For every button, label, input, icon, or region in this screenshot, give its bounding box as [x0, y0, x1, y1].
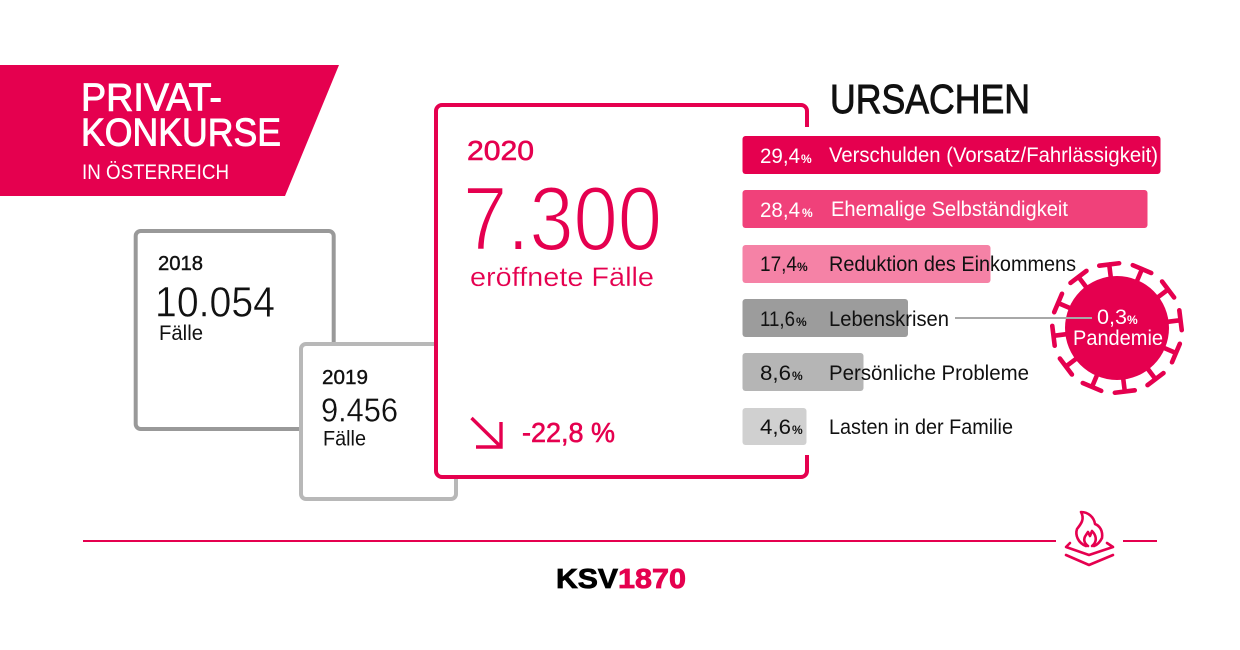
virus: Pandemie: Pandemie [1073, 327, 1163, 350]
title banner [0, 65, 339, 196]
bar: Selbständigkeit: 28,4 [760, 199, 800, 222]
bar: Persönliche Probleme: Persönliche Probleme [829, 362, 1029, 385]
bar: Reduktion [742, 245, 1076, 283]
footer rule [83, 540, 1157, 542]
bar: Lebenskrisen [742, 299, 949, 337]
panel: 2020: -22,8 % [522, 417, 615, 448]
panel: 2020: 2020 [467, 135, 534, 166]
panel: 2018 [136, 231, 334, 429]
logo: KSV1870 [556, 563, 686, 594]
panel: 2018: 10.054 [155, 279, 275, 327]
logo: KSV1870: 1870 [618, 563, 686, 594]
bar: Verschulden [742, 136, 1160, 174]
big number: 7.300 [463, 169, 662, 270]
bar: Lasten in der Familie: Lasten in der Familie [829, 416, 1013, 439]
title banner: KONKURSE [81, 112, 281, 155]
bar: Lasten in der Familie: % [792, 423, 803, 437]
logo: KSV1870: KSV [556, 563, 618, 594]
bar: Verschulden: Verschulden (Vorsatz/Fahrlässigkeit) [829, 144, 1158, 167]
panel: 2019: 2019 [322, 367, 368, 389]
bar: Lebenskrisen: % [796, 315, 807, 329]
heading: Ursachen: URSACHEN [830, 76, 1030, 122]
panel: 2019: Fälle [323, 428, 366, 451]
panel: 2020 [436, 105, 816, 477]
bar: Selbständigkeit: % [802, 206, 813, 220]
panel: 2018: Fälle [159, 322, 203, 345]
bar: Lebenskrisen: 11,6 [760, 308, 795, 331]
panel: 2018: 2018 [158, 253, 203, 275]
bar: Selbständigkeit [742, 190, 1148, 228]
bar: Selbständigkeit: Ehemalige Selbständigkeit [831, 198, 1068, 221]
bar: Lebenskrisen: Lebenskrisen [829, 308, 949, 331]
virus: Pandemie: 0,3 [1097, 306, 1127, 329]
panel: 2019 [301, 344, 456, 499]
icon: down arrow [472, 418, 501, 447]
bar: Reduktion: % [797, 260, 808, 274]
panel: 2020: eröffnete Fälle [470, 262, 654, 292]
icon: flame on layers [1066, 512, 1113, 565]
bar: Lasten in der Familie: 4,6 [760, 416, 791, 439]
virus: Pandemie: % [1127, 313, 1138, 327]
bar: Persönliche Probleme: % [792, 369, 803, 383]
bar: Verschulden: 29,4 [760, 145, 800, 168]
bar: Verschulden: % [801, 152, 812, 166]
virus: Pandemie [1052, 263, 1182, 393]
bar: Reduktion: 17,4 [760, 253, 797, 276]
bar: Reduktion: Reduktion des Einkommens [829, 253, 1076, 276]
panel: 2019: 9.456 [321, 392, 398, 429]
bar: Persönliche Probleme: 8,6 [760, 362, 791, 385]
leader line [955, 317, 1092, 319]
bar: Persönliche Probleme [742, 353, 1029, 391]
title banner: IN ÖSTERREICH [82, 161, 229, 184]
title banner: PRIVAT- [81, 77, 222, 120]
bar: Lasten in der Familie [742, 408, 1013, 445]
